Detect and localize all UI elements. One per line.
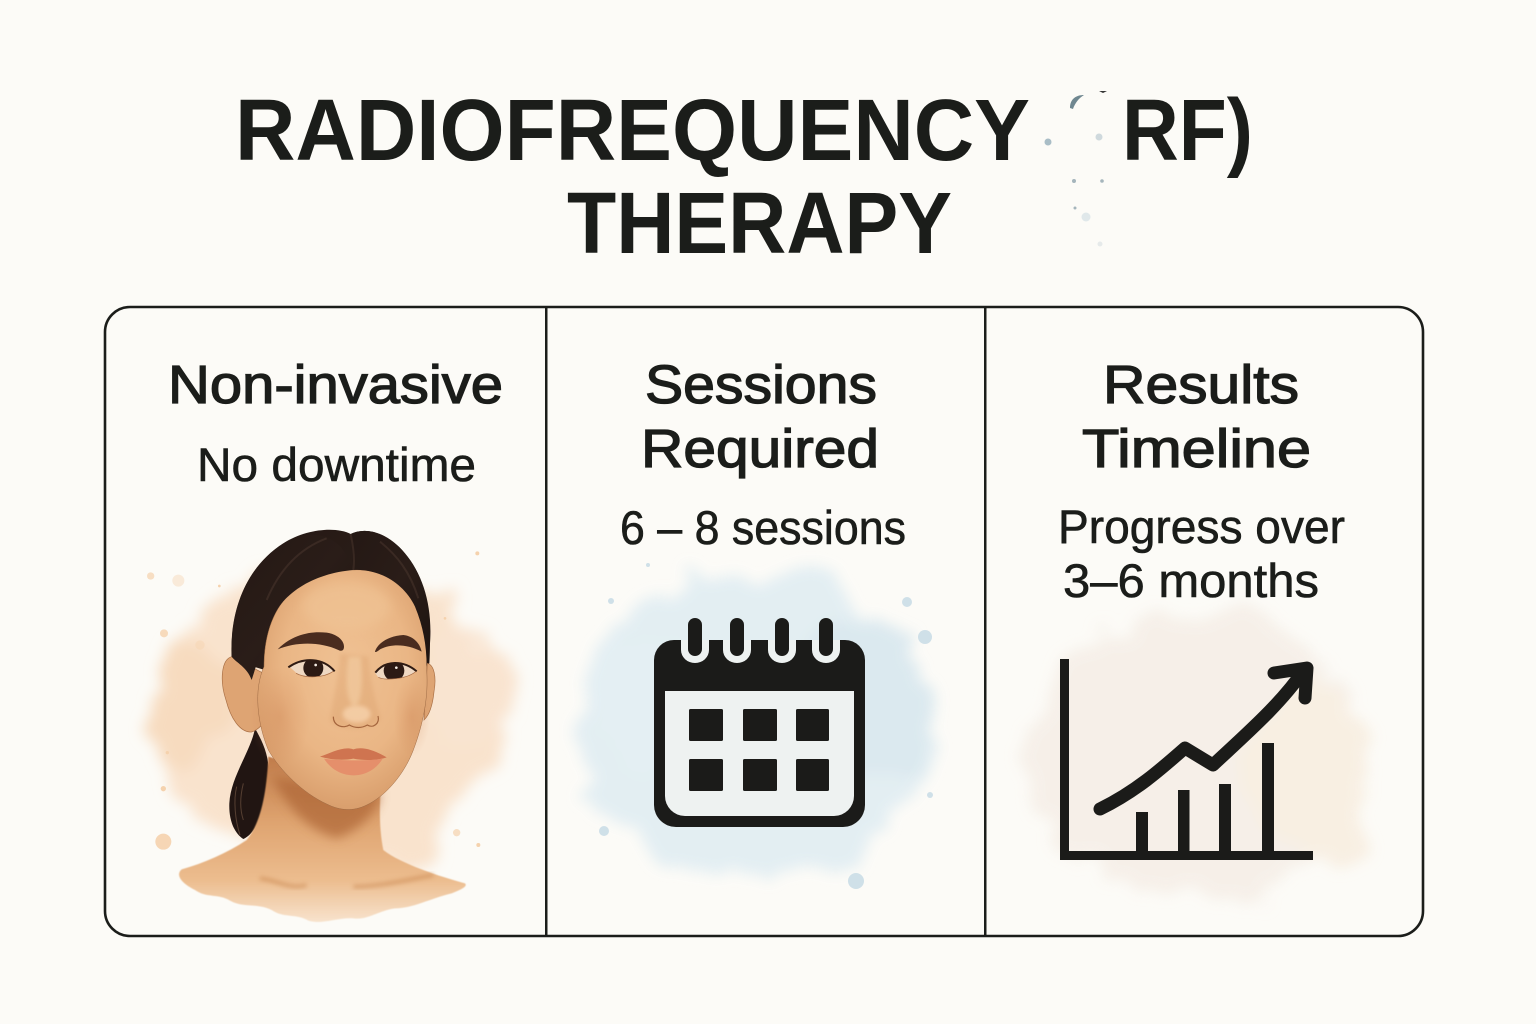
heading: timeline: Timeline: [1082, 419, 1311, 479]
paint droplets in title gap: [1044, 91, 1107, 246]
column divider right: [984, 307, 986, 936]
left eyebrow: [278, 632, 344, 651]
column divider left: [545, 307, 548, 936]
left eye: [288, 658, 335, 678]
neck and shoulders: [179, 757, 466, 922]
panel: results timeline text: [1058, 355, 1345, 607]
sub-text: 3-6 months: 3–6 months: [1063, 554, 1319, 607]
icon: rising line chart: [1060, 659, 1313, 860]
panel: sessions required text: [620, 355, 906, 554]
sub-text: no downtime: No downtime: [197, 438, 476, 491]
trend arrow: [1100, 668, 1307, 809]
left ear: [222, 657, 268, 732]
chart axes: [1060, 659, 1313, 860]
skin speckles: [147, 551, 480, 850]
right eye: [374, 662, 418, 680]
blue splatter dots: [599, 563, 933, 889]
left cheek shading: [250, 667, 310, 767]
heading: results: Results: [1103, 355, 1299, 415]
nose: [330, 653, 381, 729]
neck shadow: [272, 777, 381, 838]
icon: calendar: [654, 618, 865, 827]
right eyebrow: [375, 635, 422, 652]
watercolor wash: blue behind calendar: [577, 573, 935, 877]
forehead highlight: [303, 583, 390, 630]
lips: [320, 748, 387, 775]
title line one right: RF): [1122, 82, 1253, 179]
title: [235, 82, 1253, 272]
hair back: [231, 530, 430, 697]
left hair sweep over temple: [231, 535, 353, 680]
ponytail: [229, 728, 269, 839]
chart bars: [1136, 743, 1274, 852]
title line one left: RADIOFREQUENCY: [235, 82, 1030, 179]
collarbone shadow: [260, 875, 433, 887]
title line two: THERAPY: [567, 175, 952, 272]
heading: required: Required: [641, 419, 879, 479]
sub-text: progress over: Progress over: [1058, 500, 1345, 553]
watercolor wash: orange behind face: [145, 570, 512, 860]
face: [258, 570, 427, 810]
right cheek shading: [393, 677, 430, 757]
right hair sweep over temple: [351, 531, 430, 667]
hair strands on ponytail: [235, 783, 243, 835]
sub-text: 6-8 sessions: 6 – 8 sessions: [620, 501, 906, 554]
watercolor wash: beige behind chart: [1025, 610, 1370, 900]
hair parting sheen: [267, 534, 418, 600]
comparison table frame: [105, 307, 1423, 936]
portrait of a woman: [147, 530, 480, 922]
panel: non-invasive text: [168, 355, 503, 491]
heading: sessions: Sessions: [645, 355, 877, 415]
right ear: [424, 663, 435, 720]
heading: non-invasive: Non-invasive: [168, 355, 503, 415]
